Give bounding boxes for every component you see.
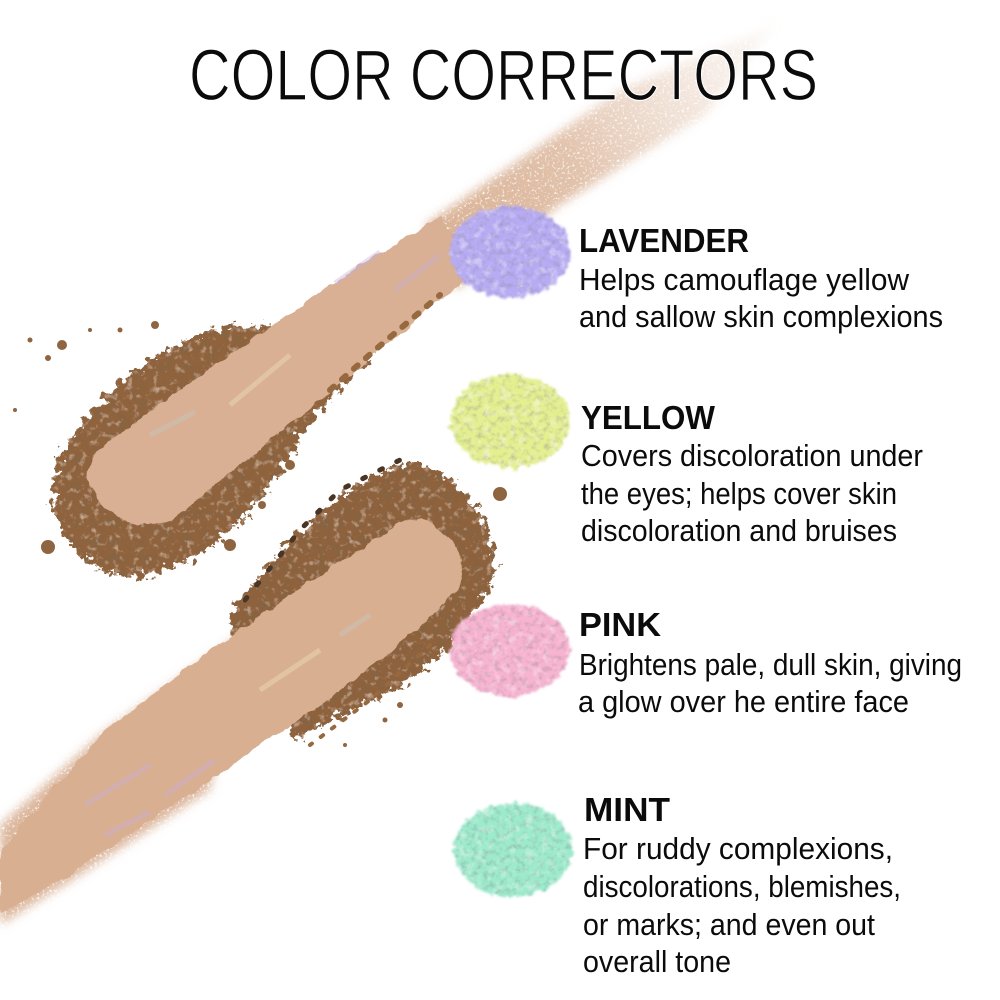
- lower swatch crumbled brown edge: [228, 464, 495, 738]
- yellow text: the eyes; helps cover skin: [581, 477, 897, 511]
- mint powder icon: [454, 803, 572, 897]
- lower powder swatch: [0, 464, 495, 925]
- scattered crumbs: [13, 295, 507, 747]
- upper swatch fading tail: [425, 25, 775, 290]
- yellow text: YELLOW: [581, 399, 716, 436]
- pink powder icon: [450, 604, 570, 696]
- lavender text: and sallow skin complexions: [579, 300, 943, 334]
- upper swatch color streaks: [150, 252, 440, 435]
- yellow powder icon: [450, 374, 570, 468]
- mint text: For ruddy complexions,: [583, 832, 893, 866]
- mint text: overall tone: [583, 945, 731, 979]
- yellow text: discoloration and bruises: [581, 514, 897, 548]
- mint text: [583, 791, 901, 979]
- yellow text: Covers discoloration under: [581, 439, 923, 473]
- lavender powder icon: [450, 206, 570, 298]
- lower swatch smooth body: [0, 519, 463, 915]
- lavender text: Helps camouflage yellow: [579, 263, 910, 297]
- mint text: discolorations, blemishes,: [583, 870, 901, 904]
- lower swatch tail: [0, 635, 240, 925]
- upper swatch crumbled brown edge: [52, 325, 375, 578]
- lavender text: LAVENDER: [579, 222, 749, 259]
- yellow text: [581, 399, 923, 548]
- lower swatch color streaks: [85, 615, 370, 835]
- pink text: PINK: [579, 606, 661, 643]
- pink text: [578, 606, 962, 719]
- lavender text: [579, 222, 943, 334]
- upper swatch smooth body: [88, 215, 478, 526]
- title: COLOR CORRECTORS: [189, 36, 818, 116]
- pink text: Brightens pale, dull skin, giving: [579, 648, 962, 682]
- mint text: MINT: [584, 791, 670, 828]
- pink text: a glow over he entire face: [578, 685, 909, 719]
- mint text: or marks; and even out: [583, 908, 875, 942]
- upper powder swatch: [52, 25, 775, 578]
